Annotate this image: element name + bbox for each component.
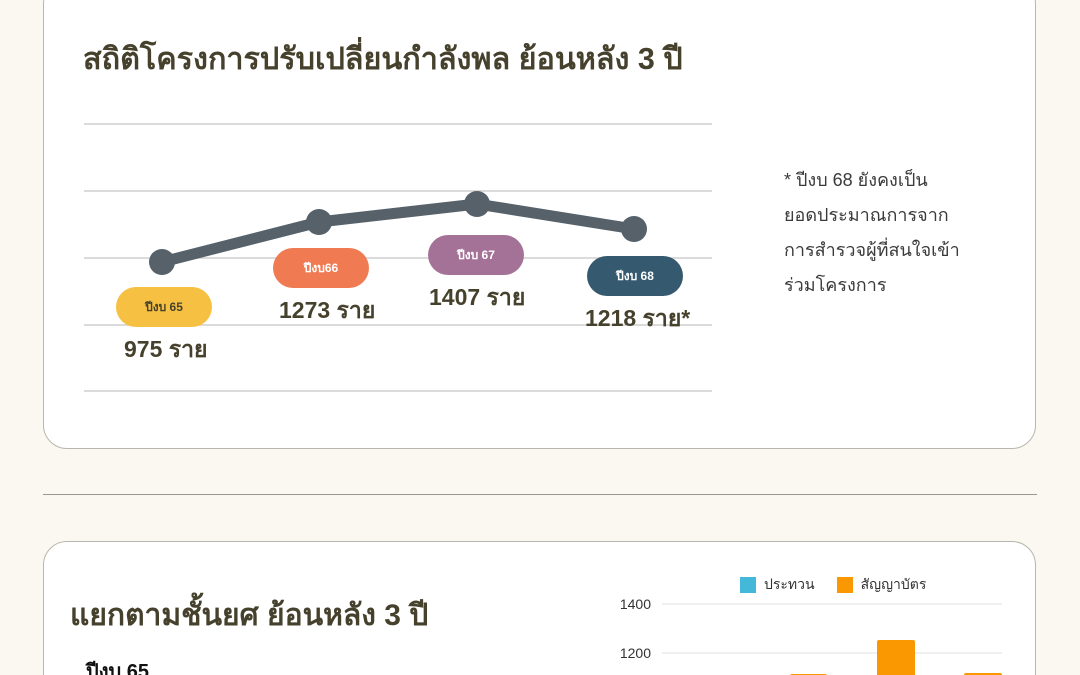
note: ยอดประมาณการจาก	[784, 205, 949, 225]
label: 68: ปีงบ 68	[616, 268, 654, 282]
label: 68	[587, 256, 683, 296]
value 65: 975 ราย	[124, 336, 208, 362]
label: 65	[116, 287, 212, 327]
label: 66	[273, 248, 369, 288]
label: 67: ปีงบ 67	[457, 248, 495, 262]
label: 66: ปีงบ66	[304, 260, 338, 274]
panel: rank breakdown	[43, 541, 1036, 675]
bar chart: 1400	[620, 596, 651, 612]
legend: ประทวน สัญญาบัตร	[764, 576, 926, 592]
title 2: แยกตามชั้นยศ ย้อนหลัง 3 ปี	[70, 599, 428, 632]
value 68: 1218 ราย*	[585, 305, 690, 331]
note: ร่วมโครงการ	[784, 275, 886, 295]
title: สถิติโครงการปรับเปลี่ยนกำลังพล ย้อนหลัง 3 ปี	[83, 42, 683, 76]
value 66: 1273 ราย	[279, 297, 375, 323]
value 67: 1407 ราย	[429, 284, 525, 310]
bar chart: 1200	[620, 645, 651, 661]
panel: line chart	[43, 0, 1036, 449]
line chart	[84, 123, 712, 392]
label: 67	[428, 235, 524, 275]
bar chart	[620, 596, 1002, 675]
label: 65: ปีงบ 65	[145, 300, 183, 314]
note: * ปีงบ 68 ยังคงเป็น	[784, 170, 928, 190]
note	[784, 169, 960, 295]
note: การสำรวจผู้ที่สนใจเข้า	[784, 240, 960, 260]
